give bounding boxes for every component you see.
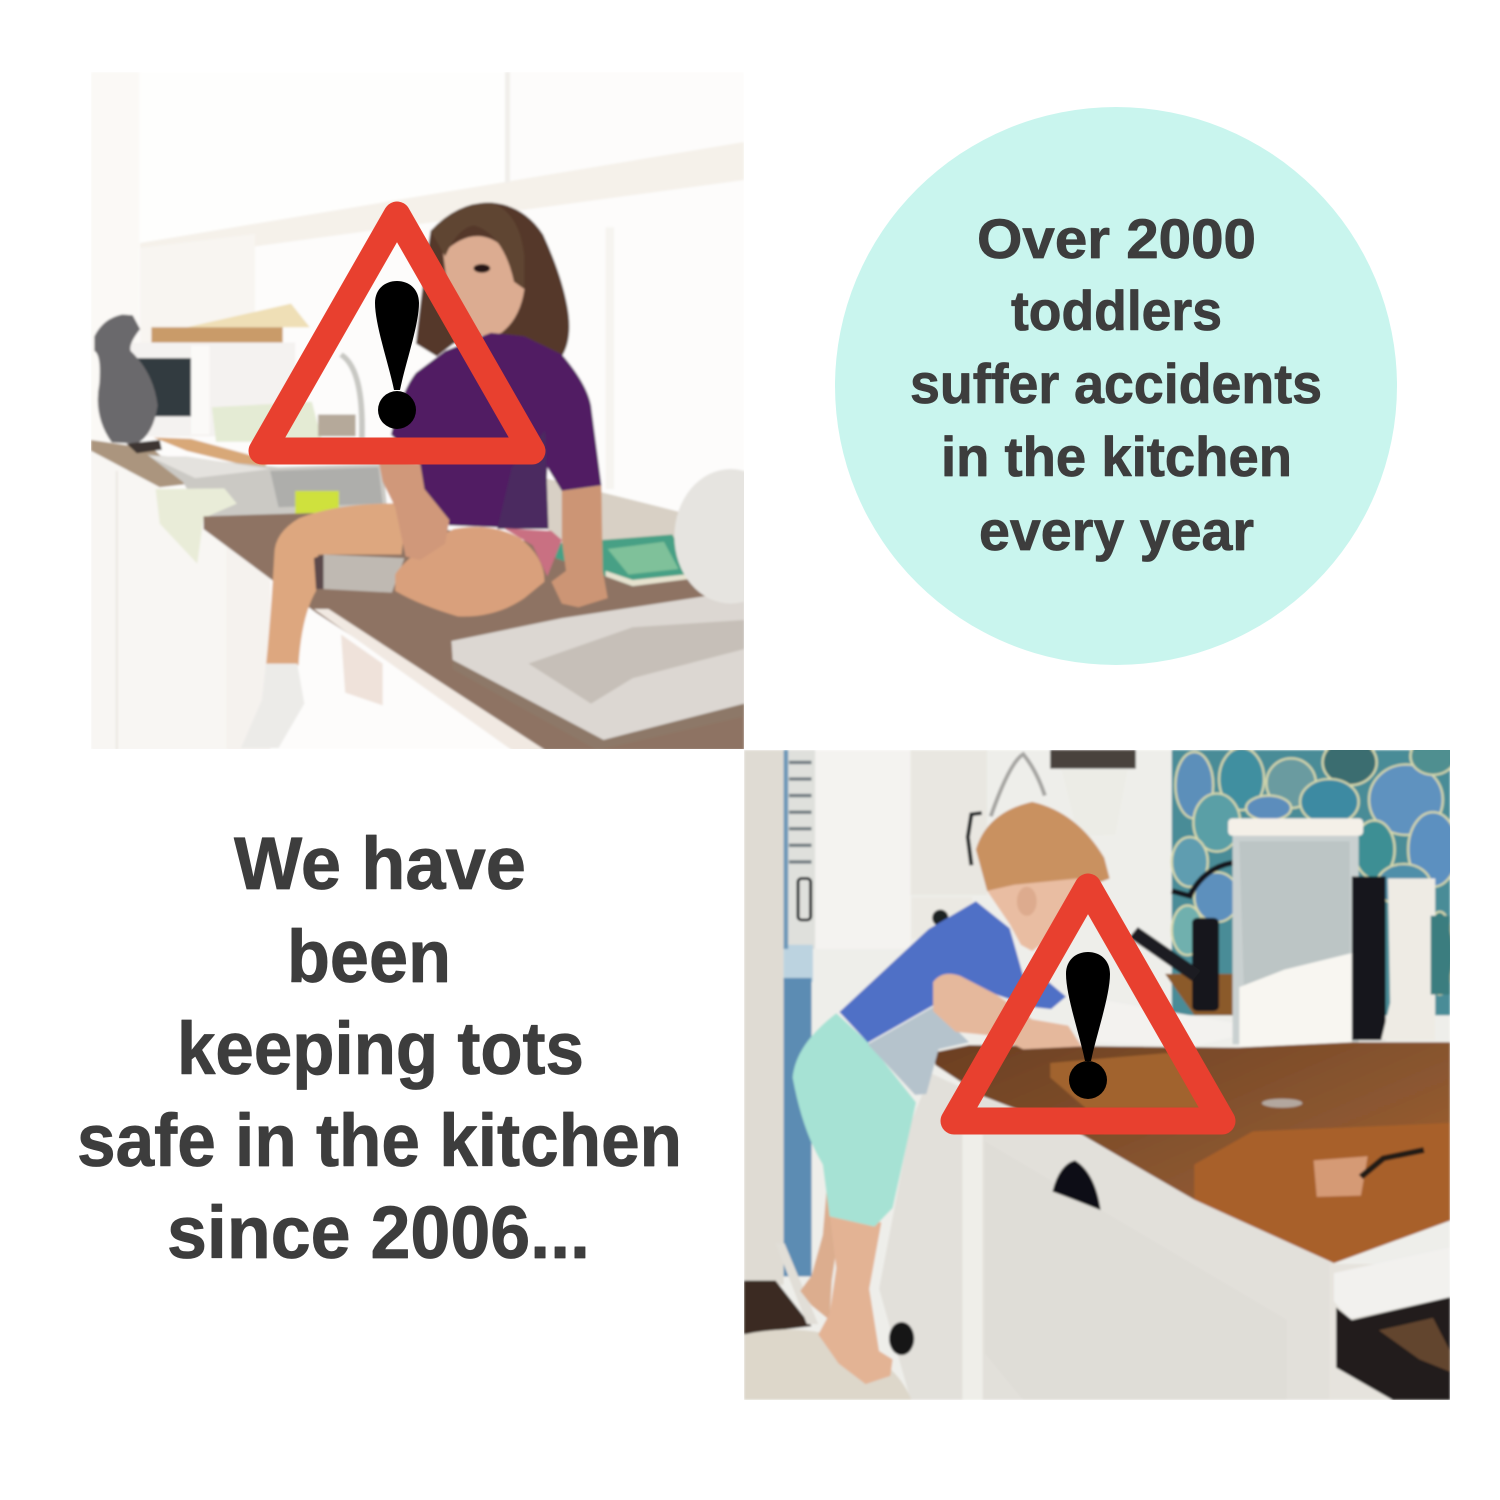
girl's face bbox=[443, 236, 524, 338]
patterned panel bbox=[497, 431, 549, 529]
statistic circle bbox=[835, 107, 1397, 665]
white ribbed stack bbox=[1381, 878, 1435, 1040]
hanging towel bbox=[991, 754, 1045, 816]
right arm and hand bbox=[551, 485, 608, 607]
photo: girl sitting on kitchen counter bbox=[91, 72, 787, 750]
white column bbox=[815, 750, 911, 949]
exclamation mark: top photo bbox=[375, 281, 419, 429]
scale tile wall bbox=[1172, 738, 1458, 1015]
stool bbox=[744, 1329, 912, 1400]
hanging bucket with utensils bbox=[1048, 750, 1138, 770]
toddler head bbox=[976, 802, 1110, 951]
backsplash ledge bbox=[1165, 974, 1235, 1015]
statistic text: in the kitchen bbox=[941, 425, 1292, 488]
heritage statement text: keeping tots bbox=[177, 1007, 584, 1090]
sink and dish rack bbox=[147, 455, 387, 516]
marble board bbox=[451, 590, 744, 750]
heritage statement text: been bbox=[287, 915, 451, 998]
microwave bbox=[129, 343, 295, 436]
warning triangle: top photo bbox=[262, 215, 532, 451]
back wall section bbox=[545, 478, 683, 547]
book bbox=[556, 535, 696, 586]
white sink bbox=[1095, 999, 1237, 1046]
girl's fringe bbox=[431, 203, 524, 289]
toddler shirt bbox=[839, 901, 1066, 1043]
tea towel bbox=[156, 488, 237, 564]
white cabinet bbox=[879, 1073, 1334, 1400]
heritage statement text bbox=[77, 822, 682, 1274]
shelf with boxes bbox=[151, 304, 310, 343]
toddler back leg bbox=[800, 1181, 841, 1320]
glass dome bbox=[672, 468, 744, 604]
upper cabinet bbox=[912, 752, 986, 926]
left counter edge bbox=[91, 440, 191, 487]
toddler shirt hem bbox=[868, 1007, 969, 1095]
toddler shorts bbox=[793, 1013, 916, 1227]
right leg bbox=[395, 527, 544, 616]
statistic text bbox=[910, 207, 1322, 562]
grey sock bbox=[314, 555, 404, 593]
rolling pin bbox=[126, 437, 268, 470]
underwear bbox=[504, 528, 562, 576]
heritage statement text: since 2006... bbox=[167, 1191, 590, 1274]
girl's hair bbox=[416, 203, 569, 356]
teal vase bbox=[1431, 916, 1450, 995]
shutter and blue panel bbox=[784, 750, 815, 1276]
statistic text: Over 2000 bbox=[977, 207, 1256, 270]
wooden worktop bbox=[933, 1042, 1450, 1263]
exclamation mark: bottom photo bbox=[1066, 952, 1110, 1099]
black ribbed stack bbox=[1352, 876, 1386, 1040]
kitchen scene in zoomed coordinates bbox=[744, 738, 1458, 1400]
baseboard bbox=[776, 1243, 818, 1324]
purple top bbox=[391, 333, 601, 529]
counter front edge bbox=[314, 609, 545, 750]
kitchen scene in zoomed coordinates bbox=[91, 203, 787, 750]
faucet bbox=[1134, 863, 1233, 1011]
toddler arm bbox=[933, 974, 1082, 1049]
photo: toddler climbing kitchen cabinet bbox=[744, 738, 1458, 1400]
left arm and hand bbox=[379, 460, 449, 560]
girl's eye bbox=[474, 264, 490, 273]
textured left wall bbox=[744, 750, 784, 1285]
wall knob bbox=[889, 1322, 914, 1355]
warning triangle: bottom photo bbox=[954, 887, 1222, 1121]
white sock bbox=[241, 664, 304, 748]
cabinet cup handle bbox=[1052, 1160, 1101, 1210]
left leg bbox=[266, 503, 408, 665]
statistic text: suffer accidents bbox=[910, 352, 1322, 415]
heritage statement text: We have bbox=[234, 822, 526, 905]
right foreground objects bbox=[1329, 1247, 1450, 1400]
toddler front leg bbox=[818, 1212, 893, 1384]
cat bbox=[94, 315, 158, 444]
heritage statement text: safe in the kitchen bbox=[77, 1099, 682, 1182]
left cabinets bbox=[91, 451, 270, 750]
flour jar bbox=[1228, 818, 1363, 1046]
main counter bbox=[204, 513, 744, 750]
statistic text: every year bbox=[979, 499, 1254, 562]
floor bbox=[744, 1281, 812, 1334]
statistic text: toddlers bbox=[1011, 279, 1222, 342]
dotted tray and lamp bbox=[212, 355, 362, 442]
